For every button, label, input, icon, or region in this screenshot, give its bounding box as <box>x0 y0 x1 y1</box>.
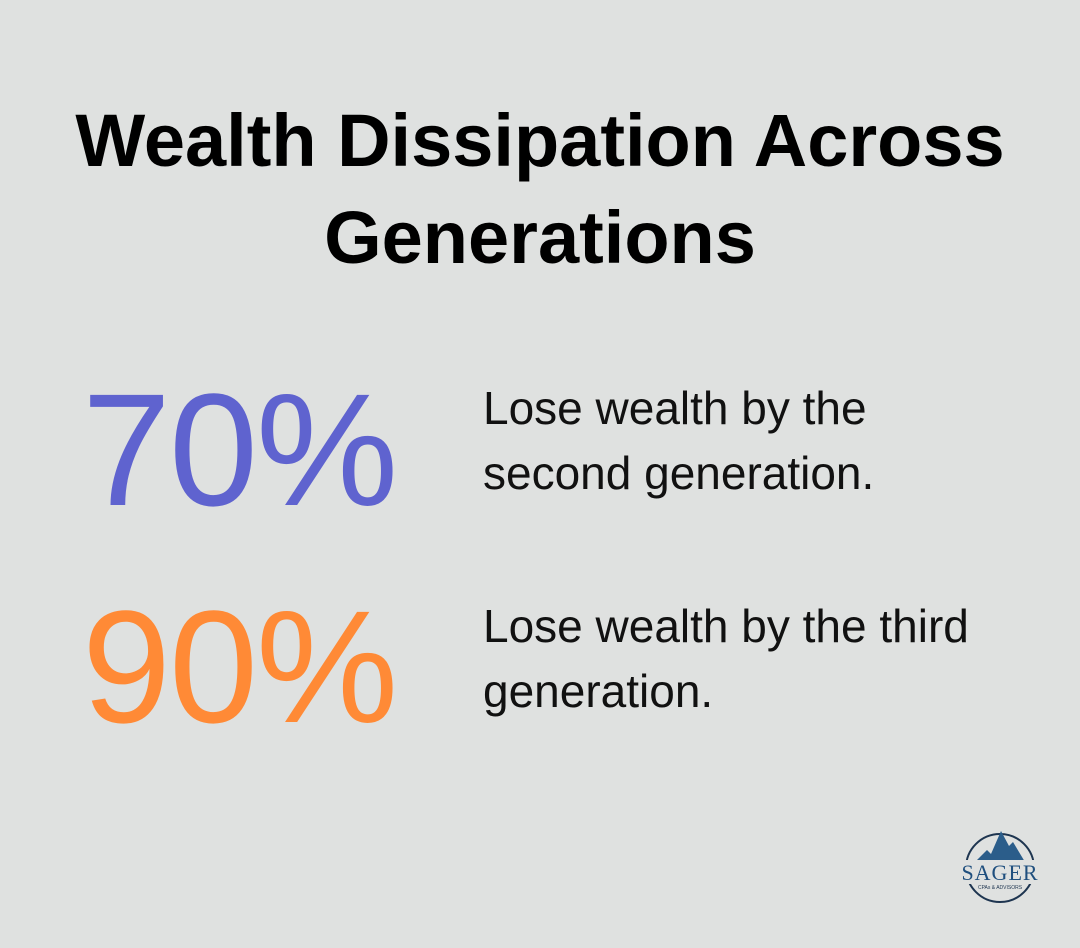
logo: Sager: SAGER <box>961 860 1039 885</box>
logo: Sager <box>961 831 1039 903</box>
title: Generations <box>324 196 756 279</box>
stat: 90%: 90% <box>82 577 396 756</box>
logo: Sager: CPAs & ADVISORS <box>978 885 1023 891</box>
text: 90% description: generation. <box>483 665 713 717</box>
text: 90% description <box>483 600 969 717</box>
text: 70% description: Lose wealth by the <box>483 382 867 434</box>
title <box>75 99 1005 279</box>
text: 70% description <box>483 382 874 499</box>
stat: 70%: 70% <box>82 360 396 539</box>
title: Wealth Dissipation Across <box>75 99 1005 182</box>
text: 70% description: second generation. <box>483 447 874 499</box>
text: 90% description: Lose wealth by the third <box>483 600 969 652</box>
